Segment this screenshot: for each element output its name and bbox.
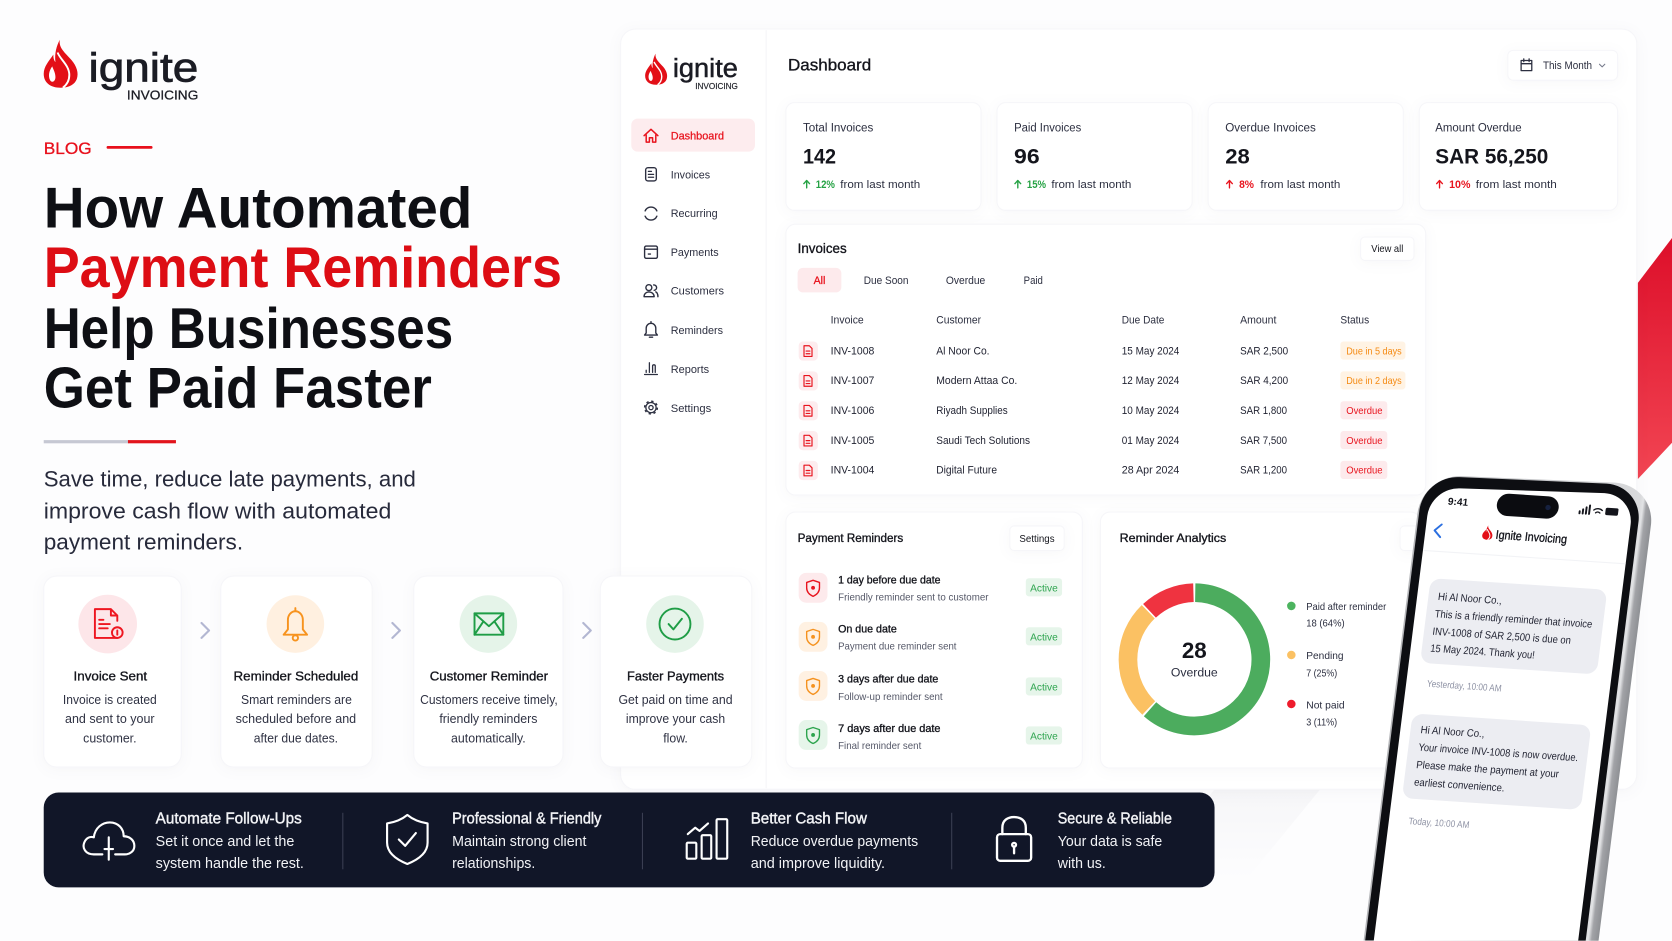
nav: recurring bbox=[645, 207, 718, 220]
step card: invoice sent: customer. bbox=[83, 730, 136, 745]
blog eyebrow: BLOG bbox=[44, 139, 92, 158]
icon: check circle bbox=[660, 609, 690, 640]
payment reminders panel bbox=[786, 512, 1082, 768]
reminder: 7 days after bbox=[799, 720, 1062, 752]
icon: flame bbox=[44, 40, 78, 88]
table row INV-1008 bbox=[799, 341, 1405, 361]
step card: customer reminder: automatically. bbox=[451, 730, 526, 745]
filter tabs: Overdue bbox=[946, 275, 985, 287]
step card: reminder scheduled bbox=[221, 576, 372, 767]
table header: Status bbox=[1340, 314, 1369, 326]
reminder: 3 days after: Active bbox=[1030, 683, 1058, 694]
nav: settings: Settings bbox=[671, 403, 712, 415]
reminder: 3 days after: 3 days after due date bbox=[838, 674, 938, 686]
nav: recurring: Recurring bbox=[671, 208, 718, 220]
chart legend: Not paid bbox=[1306, 700, 1345, 711]
chart legend bbox=[1287, 602, 1387, 728]
reminder: 1 day before: Active bbox=[1030, 584, 1058, 595]
table row INV-1005: SAR 7,500 bbox=[1240, 435, 1287, 447]
stat card: paid invoices: 96 bbox=[1014, 144, 1040, 168]
step card: faster payments bbox=[600, 576, 752, 767]
stat card: total invoices: from last month bbox=[840, 179, 920, 191]
table row INV-1007: Modern Attaa Co. bbox=[936, 375, 1017, 387]
step card: faster payments: Faster Payments bbox=[627, 669, 724, 684]
table row INV-1007: Due in 2 days bbox=[1346, 376, 1402, 387]
step card: customer reminder: Customer Reminder bbox=[430, 669, 549, 684]
benefit: secure and reliable: with us. bbox=[1057, 855, 1106, 872]
phone mockup bbox=[1364, 470, 1656, 941]
reminder: 7 days after: Final reminder sent bbox=[838, 741, 921, 752]
step card: faster payments: flow. bbox=[663, 730, 688, 745]
nav: customers: Customers bbox=[671, 286, 724, 298]
stat card: overdue invoices: from last month bbox=[1260, 179, 1340, 191]
payment reminders panel: Payment Reminders bbox=[798, 531, 903, 545]
sidebar logo bbox=[645, 54, 738, 91]
benefit: professional and friendly: Professional & Friendly bbox=[452, 810, 602, 827]
step card: reminder scheduled: after due dates. bbox=[254, 730, 338, 745]
stat card: paid invoices: from last month bbox=[1051, 179, 1131, 191]
settings button bbox=[1010, 526, 1064, 550]
table row INV-1007: INV-1007 bbox=[831, 375, 874, 387]
chart legend: 3 (11%) bbox=[1306, 717, 1337, 728]
table row INV-1005: Saudi Tech Solutions bbox=[936, 435, 1030, 447]
benefit: better cash flow: and improve liquidity. bbox=[751, 855, 885, 872]
nav: dashboard bbox=[644, 129, 724, 142]
table row INV-1004: 28 Apr 2024 bbox=[1122, 465, 1179, 477]
donut chart: Overdue bbox=[1171, 665, 1218, 679]
icon: invoice document bbox=[95, 609, 123, 638]
blog eyebrow bbox=[44, 139, 152, 158]
table row INV-1006: Riyadh Supplies bbox=[936, 405, 1008, 417]
soft panel shadow bbox=[1109, 789, 1320, 917]
nav: payments bbox=[645, 246, 719, 259]
table row INV-1008: 15 May 2024 bbox=[1122, 345, 1179, 357]
subheading: payment reminders. bbox=[44, 529, 243, 554]
message bubble: overdue notice: Please make the payment at your bbox=[1416, 759, 1560, 781]
dashboard mockup panel bbox=[621, 29, 1637, 789]
nav: reports bbox=[645, 363, 709, 376]
nav: reminders: Reminders bbox=[671, 325, 723, 337]
main headline: Get Paid Faster bbox=[44, 357, 432, 421]
benefit: secure and reliable bbox=[997, 810, 1172, 872]
step card: customer reminder: friendly reminders bbox=[439, 711, 537, 726]
table row INV-1008: Due in 5 days bbox=[1346, 346, 1402, 357]
stat card: paid invoices: Paid Invoices bbox=[1014, 121, 1081, 134]
step card: faster payments: Get paid on time and bbox=[618, 692, 733, 707]
arrow bbox=[583, 623, 591, 638]
stat card: amount overdue: from last month bbox=[1476, 179, 1557, 191]
table row INV-1004 bbox=[799, 461, 1387, 480]
table row INV-1005: 01 May 2024 bbox=[1122, 435, 1179, 447]
chart legend: 7 (25%) bbox=[1306, 668, 1337, 679]
stat card: paid invoices bbox=[997, 103, 1192, 210]
table header: Customer bbox=[936, 314, 981, 326]
benefit: professional and friendly bbox=[387, 810, 602, 872]
message bubble: friendly reminder: This is a friendly reminder that invoice bbox=[1434, 608, 1593, 631]
view all button: View all bbox=[1371, 244, 1403, 255]
reminder: on due date: On due date bbox=[838, 624, 897, 636]
phone status bar: 9:41 bbox=[1447, 497, 1469, 509]
benefit: secure and reliable: Secure & Reliable bbox=[1058, 810, 1172, 827]
step card: reminder scheduled: scheduled before and bbox=[236, 711, 356, 726]
main headline bbox=[44, 176, 562, 421]
timestamp: yesterday: Yesterday, 10:00 AM bbox=[1426, 679, 1502, 695]
benefit: professional and friendly: relationships. bbox=[452, 855, 535, 872]
brand logo: INVOICING bbox=[127, 87, 198, 102]
table row INV-1006: INV-1006 bbox=[831, 405, 874, 417]
reminder: 7 days after: Active bbox=[1030, 732, 1058, 743]
phone chat header: Ignite Invoicing bbox=[1495, 528, 1568, 546]
subheading: Save time, reduce late payments, and bbox=[44, 466, 416, 491]
filter tabs: Paid bbox=[1024, 275, 1043, 287]
benefit: secure and reliable: Your data is safe bbox=[1058, 833, 1162, 850]
filter tabs: Due Soon bbox=[864, 275, 909, 287]
chart legend: Paid after reminder bbox=[1306, 602, 1387, 613]
nav: payments: Payments bbox=[671, 247, 719, 259]
table row INV-1008: Al Noor Co. bbox=[936, 345, 990, 357]
benefit: better cash flow: Better Cash Flow bbox=[751, 810, 868, 827]
view all button bbox=[1361, 237, 1414, 260]
icon: envelope bbox=[475, 613, 503, 635]
table header: Invoice bbox=[831, 314, 864, 326]
sidebar logo: ignite bbox=[673, 55, 738, 83]
subheading bbox=[44, 466, 416, 554]
message bubble: friendly reminder: INV-1008 of SAR 2,500 is due on bbox=[1432, 626, 1572, 647]
table row INV-1004: SAR 1,200 bbox=[1240, 465, 1287, 477]
table row INV-1005: Overdue bbox=[1346, 436, 1383, 447]
nav: reminders bbox=[645, 322, 723, 337]
stat card: overdue invoices: 28 bbox=[1225, 144, 1250, 168]
step card: reminder scheduled: Reminder Scheduled bbox=[234, 669, 358, 684]
phone chat header bbox=[1423, 521, 1629, 564]
main headline: Payment Reminders bbox=[44, 236, 562, 300]
table row INV-1007 bbox=[799, 371, 1405, 391]
chart legend: 18 (64%) bbox=[1306, 619, 1345, 630]
step card: invoice sent bbox=[44, 576, 181, 767]
nav: dashboard: Dashboard bbox=[671, 130, 724, 142]
brand logo bbox=[44, 40, 198, 102]
table row INV-1005: INV-1005 bbox=[831, 435, 874, 447]
table header: Amount bbox=[1240, 314, 1276, 326]
dashboard title: Dashboard bbox=[788, 56, 871, 75]
table row INV-1004: Digital Future bbox=[936, 465, 997, 477]
step card: faster payments: improve your cash bbox=[626, 711, 725, 726]
table row INV-1008: SAR 2,500 bbox=[1240, 345, 1288, 357]
date filter button bbox=[1508, 50, 1618, 80]
reminder: on due date bbox=[799, 622, 1062, 653]
headline divider bbox=[44, 440, 176, 443]
table header bbox=[831, 314, 1369, 326]
table row INV-1006 bbox=[799, 401, 1387, 420]
nav: reports: Reports bbox=[671, 364, 709, 376]
message bubble: overdue notice: Your invoice INV-1008 is now overdue. bbox=[1418, 742, 1579, 764]
benefit: automate follow-ups: Automate Follow-Ups bbox=[156, 810, 302, 827]
filter tabs: All bbox=[814, 275, 825, 287]
message bubble: friendly reminder bbox=[1420, 578, 1607, 674]
stat card: amount overdue: SAR 56,250 bbox=[1435, 144, 1548, 168]
message bubble: friendly reminder: 15 May 2024. Thank you! bbox=[1430, 643, 1535, 662]
table row INV-1007: SAR 4,200 bbox=[1240, 375, 1288, 387]
stat card: total invoices: Total Invoices bbox=[803, 121, 873, 134]
invoices table panel: Invoices bbox=[798, 240, 847, 256]
table row INV-1004: Overdue bbox=[1346, 466, 1383, 477]
subheading: improve cash flow with automated bbox=[44, 498, 391, 523]
arrow bbox=[202, 623, 209, 638]
benefit: better cash flow: Reduce overdue payments bbox=[751, 833, 918, 850]
stat card: overdue invoices bbox=[1208, 103, 1403, 210]
chart legend: Pending bbox=[1306, 651, 1344, 662]
table row INV-1006: SAR 1,800 bbox=[1240, 405, 1287, 417]
benefit: professional and friendly: Maintain strong client bbox=[452, 833, 587, 850]
dark benefits bar bbox=[44, 793, 1215, 887]
date filter button: This Month bbox=[1543, 60, 1592, 72]
table row INV-1005 bbox=[799, 431, 1387, 450]
nav: settings bbox=[645, 401, 712, 415]
message bubble: overdue notice bbox=[1402, 713, 1591, 810]
stat card: overdue invoices: Overdue Invoices bbox=[1225, 121, 1316, 134]
stat card: total invoices bbox=[786, 103, 981, 210]
reminder: on due date: Active bbox=[1030, 633, 1058, 644]
brand logo: ignite bbox=[89, 44, 198, 90]
donut chart bbox=[1128, 593, 1261, 726]
stat card: amount overdue: Amount Overdue bbox=[1435, 121, 1522, 134]
table row INV-1006: 10 May 2024 bbox=[1122, 405, 1179, 417]
arrow bbox=[392, 623, 400, 638]
table row INV-1008: INV-1008 bbox=[831, 345, 874, 357]
filter tabs bbox=[798, 268, 1043, 292]
message bubble: overdue notice: Hi Al Noor Co., bbox=[1420, 724, 1485, 740]
sidebar logo: INVOICING bbox=[695, 82, 738, 91]
nav: customers bbox=[644, 285, 724, 298]
step card: customer reminder bbox=[414, 576, 563, 767]
stat card: total invoices: 142 bbox=[803, 144, 836, 168]
main headline: Help Businesses bbox=[44, 297, 453, 361]
step card: invoice sent: and sent to your bbox=[65, 711, 155, 726]
benefit: automate follow-ups: system handle the rest. bbox=[156, 855, 304, 872]
stat card: overdue invoices: 8% bbox=[1239, 179, 1254, 191]
stat card: total invoices: 12% bbox=[816, 179, 835, 191]
benefit: automate follow-ups: Set it once and let the bbox=[156, 833, 294, 850]
step card: invoice sent: Invoice is created bbox=[63, 692, 157, 707]
reminder: 3 days after bbox=[799, 671, 1062, 703]
donut chart: 28 bbox=[1182, 638, 1207, 663]
nav: invoices bbox=[646, 168, 711, 181]
reminder: 1 day before: Friendly reminder sent to customer bbox=[838, 593, 989, 604]
reminder: 1 day before: 1 day before due date bbox=[838, 575, 941, 587]
nav: invoices: Invoices bbox=[671, 169, 711, 181]
benefit: better cash flow bbox=[687, 810, 918, 872]
main headline: How Automated bbox=[44, 176, 472, 240]
reminder analytics panel: Reminder Analytics bbox=[1120, 531, 1226, 545]
timestamp: today: Today, 10:00 AM bbox=[1408, 816, 1470, 831]
reminder: 3 days after: Follow-up reminder sent bbox=[838, 692, 943, 703]
table row INV-1006: Overdue bbox=[1346, 406, 1383, 417]
table row INV-1004: INV-1004 bbox=[831, 465, 874, 477]
icon: bell bbox=[284, 608, 307, 641]
message bubble: overdue notice: earliest convenience. bbox=[1413, 777, 1505, 794]
stat card: paid invoices: 15% bbox=[1027, 179, 1046, 191]
red accent shape bbox=[1638, 238, 1672, 479]
step card: reminder scheduled: Smart reminders are bbox=[241, 692, 352, 707]
reminder: 1 day before bbox=[799, 573, 1062, 604]
stat card: amount overdue bbox=[1419, 103, 1618, 210]
step card: customer reminder: Customers receive timely, bbox=[420, 692, 558, 707]
invoices table panel bbox=[786, 224, 1426, 495]
sidebar navigation bbox=[631, 119, 755, 415]
table header: Due Date bbox=[1122, 314, 1164, 326]
message bubble: friendly reminder: Hi Al Noor Co., bbox=[1437, 591, 1503, 607]
settings button: Settings bbox=[1019, 534, 1055, 545]
step card: invoice sent: Invoice Sent bbox=[74, 669, 147, 684]
reminder analytics panel bbox=[1100, 512, 1421, 768]
table row INV-1007: 12 May 2024 bbox=[1122, 375, 1179, 387]
reminder: 7 days after: 7 days after due date bbox=[838, 723, 941, 735]
stat card: amount overdue: 10% bbox=[1449, 179, 1471, 191]
reminder: on due date: Payment due reminder sent bbox=[838, 642, 957, 653]
benefit: automate follow-ups bbox=[84, 810, 304, 872]
phone status bar bbox=[1447, 490, 1620, 523]
